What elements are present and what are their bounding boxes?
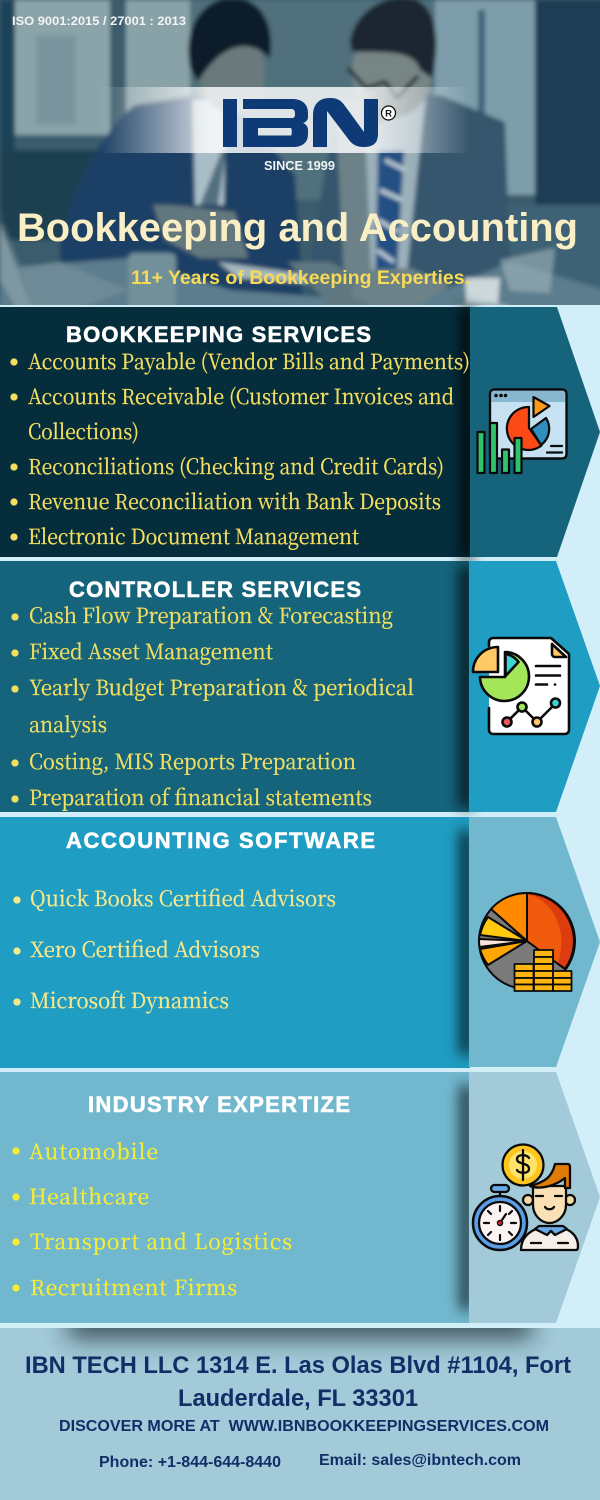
software list: Microsoft Dynamics [30,985,229,1015]
footer panel [0,1312,600,1500]
registered mark: R [385,108,392,120]
service list: Collections) [28,416,139,446]
since label: SINCE 1999 [264,159,335,173]
heading: ACCOUNTING SOFTWARE [66,828,375,853]
service list: Revenue Reconciliation with Bank Deposits [28,486,441,516]
icon: pie chart with coin stacks [479,893,575,991]
title: Bookkeeping and Accounting [17,206,578,250]
subtitle: 11+ Years of Bookkeeping Experties. [131,267,470,289]
service list: Cash Flow Preparation & Forecasting [29,600,393,630]
address: IBN TECH LLC 1314 E. Las Olas Blvd #1104, Fort [25,1352,571,1379]
panel: bookkeeping services [0,307,600,557]
service list: Accounts Receivable (Customer Invoices and [28,381,454,411]
panel: controller services [0,561,600,812]
header photo: two businessmen reviewing a tablet [0,0,600,330]
heading: CONTROLLER SERVICES [69,577,361,602]
website: DISCOVER MORE AT WWW.IBNBOOKKEEPINGSERVICES.COM [59,1418,549,1435]
panel: industry expertize [0,1072,600,1323]
service list: Fixed Asset Management [29,636,273,666]
registered mark [382,106,396,120]
service list: analysis [29,709,107,739]
left man [60,95,303,300]
address: Lauderdale, FL 33301 [178,1385,418,1412]
icon: IBN logo mark [223,98,378,147]
logo band [100,87,470,153]
service list [12,600,414,812]
service list [10,346,470,551]
right man [320,94,510,257]
table, laptop, tablet, cup [0,258,600,310]
email: Email: sales@ibntech.com [319,1452,521,1469]
heading: BOOKKEEPING SERVICES [66,322,371,347]
service list: Costing, MIS Reports Preparation [29,746,356,776]
panel: accounting software [0,817,600,1068]
phone: Phone: +1-844-644-8440 [99,1454,281,1471]
software list [14,883,336,1015]
service list: Reconciliations (Checking and Credit Cards) [28,451,444,481]
service list: Electronic Document Management [28,521,359,551]
software list: Quick Books Certified Advisors [30,883,336,913]
industry list: Transport and Logistics [30,1226,292,1256]
service list: Yearly Budget Preparation & periodical [29,672,414,702]
icon: report document with pie and line chart [473,638,569,734]
service list: Accounts Payable (Vendor Bills and Payments) [28,346,470,376]
industry list: Healthcare [29,1181,149,1211]
software list: Xero Certified Advisors [30,934,260,964]
certification label: ISO 9001:2015 / 27001 : 2013 [12,14,186,28]
icon: dashboard window with pie and bars [478,389,566,473]
heading: INDUSTRY EXPERTIZE [88,1092,350,1117]
address [25,1352,571,1412]
icon: person with stopwatch and dollar coin [473,1144,578,1250]
service list: Preparation of financial statements [29,782,372,812]
footer top shadow [68,1312,532,1338]
industry list: Recruitment Firms [30,1272,237,1302]
industry list: Automobile [29,1136,158,1166]
industry list [12,1136,292,1302]
